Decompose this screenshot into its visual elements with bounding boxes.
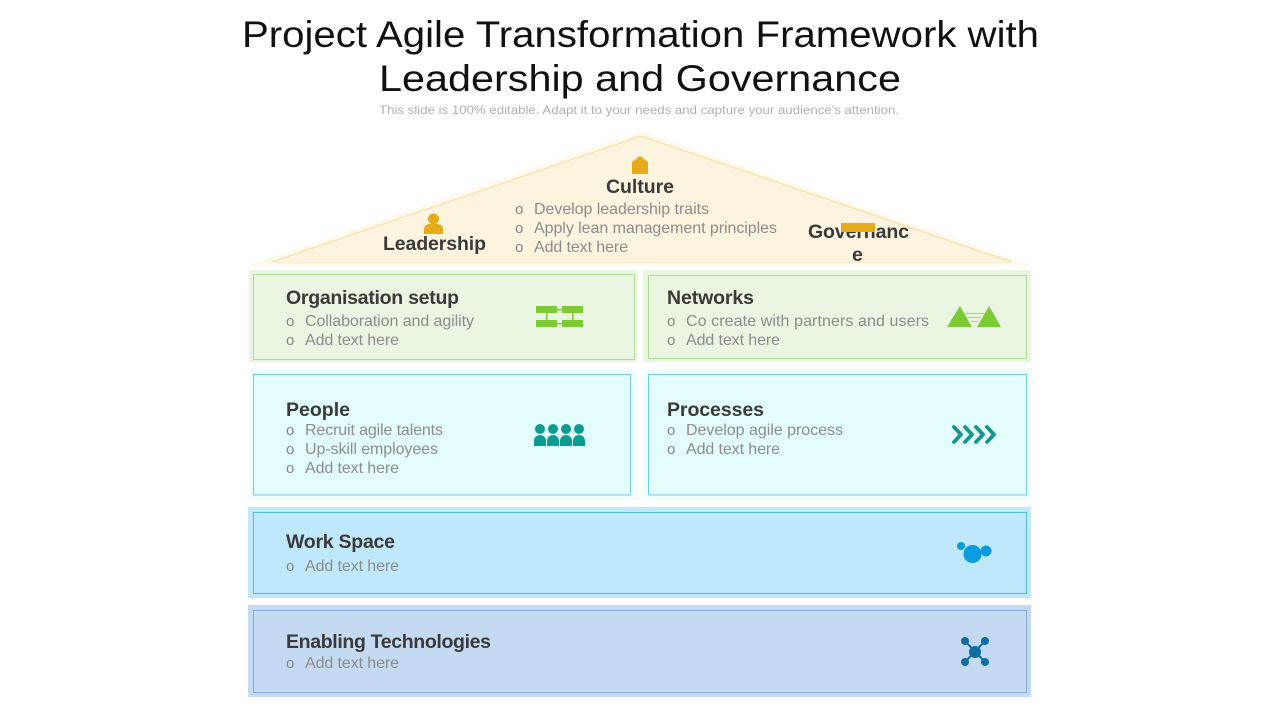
- icon: networks triangles: [947, 306, 1001, 327]
- heading: leadership: Leadership: [383, 233, 486, 255]
- list: culture: Apply lean management principles: [534, 220, 777, 237]
- panel: work space: [248, 507, 1031, 598]
- panel: people: [249, 369, 637, 500]
- icon: network hub: [961, 637, 989, 666]
- panel: organisation setup: [249, 270, 637, 362]
- list: [667, 313, 929, 349]
- icon: people group: [534, 424, 585, 446]
- panel: roof: [249, 131, 1031, 266]
- subtitle: This slide is 100% editable. Adapt it to your needs and capture your audience's attention.: [379, 103, 899, 117]
- list: Add text here: [305, 558, 399, 575]
- icon: leadership person: [424, 214, 443, 234]
- heading: Organisation setup: [286, 287, 459, 309]
- heading: Enabling Technologies: [286, 631, 491, 653]
- list: [286, 313, 474, 349]
- list: o: [286, 332, 294, 349]
- icon: governance blocks: [841, 223, 875, 232]
- list: o: [286, 313, 294, 330]
- heading: culture: Culture: [606, 176, 674, 198]
- heading: Networks: [667, 287, 754, 309]
- icon: chevrons: [954, 427, 994, 442]
- icon: org blocks: [536, 306, 583, 327]
- heading: governance: [808, 221, 909, 266]
- heading: Work Space: [286, 531, 395, 553]
- list: culture: o: [515, 239, 523, 256]
- list: culture: Develop leadership traits: [534, 201, 709, 218]
- list: culture: o: [515, 201, 523, 218]
- list: Recruit agile talents: [305, 422, 443, 439]
- list: [286, 422, 443, 477]
- heading: Processes: [667, 399, 764, 421]
- list: o: [667, 313, 675, 330]
- list: Add text here: [305, 460, 399, 477]
- heading: People: [286, 399, 350, 421]
- list: Up-skill employees: [305, 441, 438, 458]
- list: Add text here: [305, 332, 399, 349]
- title: Leadership and Governance: [379, 58, 901, 99]
- list: culture: o: [515, 220, 523, 237]
- list: culture: Add text here: [534, 239, 628, 256]
- heading: governance: e: [852, 244, 863, 266]
- list: culture: [515, 201, 777, 256]
- heading: governance: Governanc: [808, 221, 909, 243]
- panel: enabling technologies: [248, 605, 1031, 697]
- list: o: [286, 558, 294, 575]
- list: o: [286, 655, 294, 672]
- panel: networks: [643, 270, 1031, 362]
- panel: processes: [643, 369, 1031, 500]
- title: Project Agile Transformation Framework with: [242, 14, 1039, 55]
- list: Add text here: [686, 441, 780, 458]
- icon: bubbles: [957, 542, 992, 563]
- icon: culture house: [632, 156, 648, 174]
- list: o: [667, 332, 675, 349]
- title: [242, 14, 1039, 99]
- list: Collaboration and agility: [305, 313, 474, 330]
- list: Develop agile process: [686, 422, 843, 439]
- list: o: [667, 441, 675, 458]
- list: Co create with partners and users: [686, 313, 929, 330]
- list: [667, 422, 843, 458]
- list: o: [286, 422, 294, 439]
- list: o: [286, 441, 294, 458]
- list: Add text here: [305, 655, 399, 672]
- list: o: [286, 460, 294, 477]
- list: o: [667, 422, 675, 439]
- list: Add text here: [686, 332, 780, 349]
